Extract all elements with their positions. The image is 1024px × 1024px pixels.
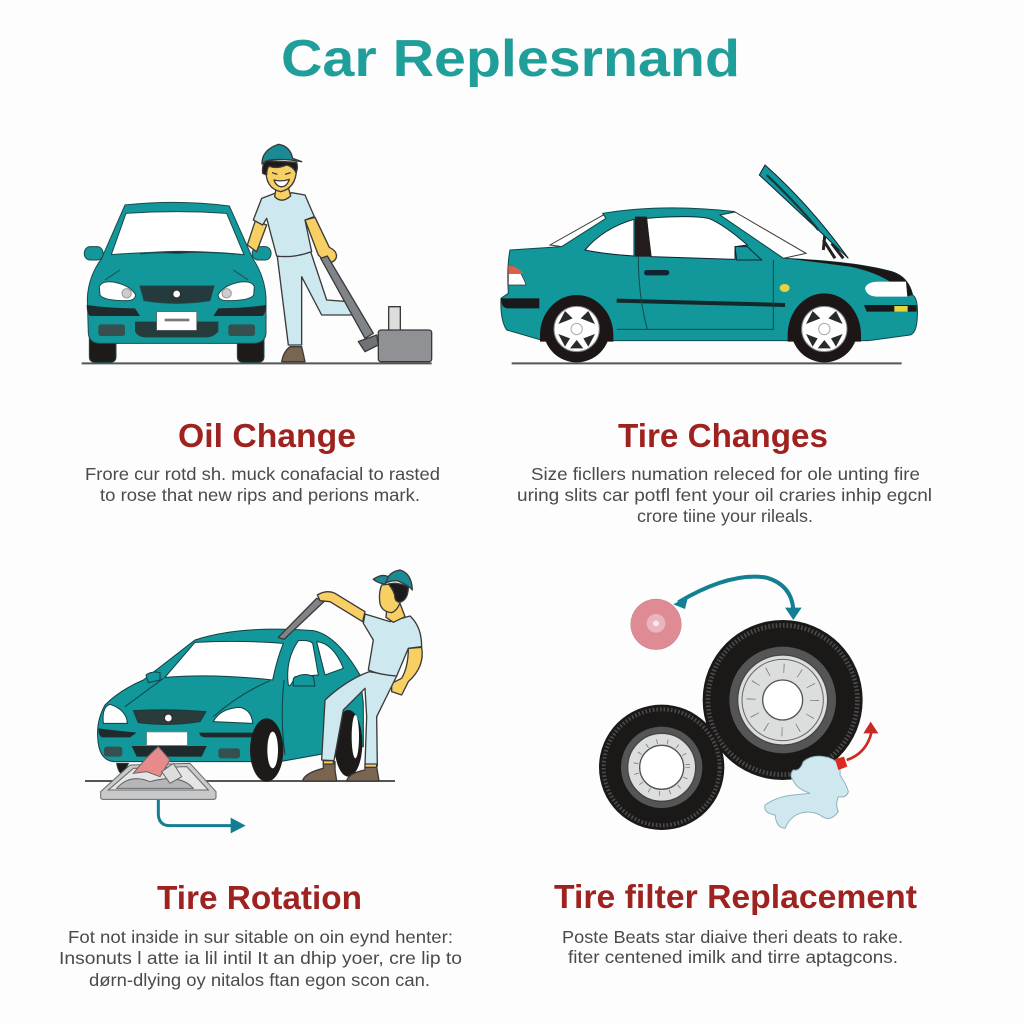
arrow: teal curved	[673, 577, 802, 620]
heading: tire changes: Tire Changes	[618, 417, 828, 454]
title: Car Replesrnand	[281, 30, 740, 88]
arrow: red curved	[835, 722, 878, 770]
cloud	[765, 756, 848, 828]
text block: oil change: Frore cur rotd sh. muck conafacial to rasted	[85, 464, 440, 484]
text block: tire filter replacement: Poste Beats star diaive theri deats to rake.	[562, 927, 903, 947]
mechanic with tool	[278, 570, 422, 781]
text block: tire changes: uring slits car potfl fent your oil craries inhip egcnl	[517, 485, 932, 505]
drain pan	[101, 747, 216, 799]
rear wheel	[540, 295, 613, 362]
panel: tire changes illustration	[501, 165, 917, 363]
front car	[84, 202, 271, 362]
arrow: drain	[158, 800, 246, 833]
panel: tire filter replacement illustration	[599, 577, 878, 830]
panel: oil change illustration	[82, 144, 432, 363]
text block: tire changes: Size ficllers numation releced for ole unting fire	[531, 464, 920, 484]
text block: oil change	[85, 464, 440, 505]
front wheel	[788, 293, 861, 362]
ground line	[512, 360, 902, 366]
text block: oil change: to rose that new rips and perions mark.	[100, 485, 420, 505]
heading: tire filter replacement: Tire filter Replacement	[554, 878, 917, 915]
text block: tire changes: crore tiine your rileals.	[637, 506, 813, 526]
three-quarter car	[98, 629, 363, 775]
small tire	[599, 705, 724, 830]
ground line	[85, 778, 395, 784]
text block: tire rotation	[59, 927, 462, 990]
mechanic	[247, 144, 432, 362]
large tire	[703, 620, 863, 780]
text block: tire filter replacement: fiter centened imilk and tirre aptagcons.	[568, 947, 898, 967]
text block: tire filter replacement	[562, 927, 903, 967]
heading: oil change: Oil Change	[178, 417, 356, 454]
text block: tire changes	[517, 464, 932, 526]
panel: tire rotation illustration	[85, 570, 422, 833]
pink ball	[631, 599, 681, 650]
text block: tire rotation: Insonuts l atte ia lil intil It an dhip yoer, cre lip to	[59, 948, 462, 968]
ground line	[82, 360, 432, 366]
raised hood	[759, 165, 848, 258]
side car body	[501, 208, 917, 341]
heading: tire rotation: Tire Rotation	[157, 879, 362, 916]
text block: tire rotation: Fot not inɜide in sur sitable on oin eynd henter:	[68, 927, 453, 947]
text block: tire rotation: dørn-dlying oy nitalos ftan egon scon can.	[89, 970, 430, 990]
